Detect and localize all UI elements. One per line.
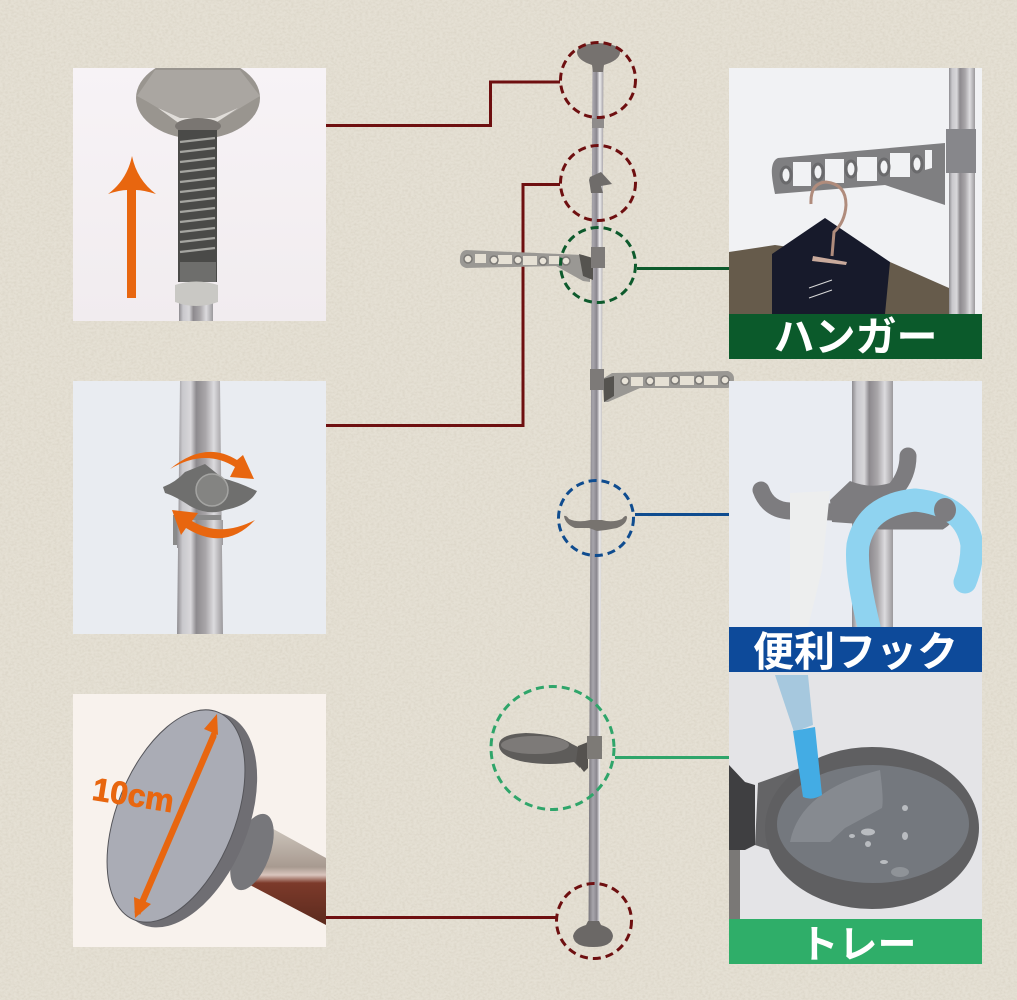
hook arms xyxy=(761,456,946,520)
pole stub xyxy=(729,850,740,919)
water drops xyxy=(849,805,909,877)
hanger arm left xyxy=(460,247,605,282)
dashed callout circles xyxy=(491,42,636,958)
knob xyxy=(163,464,257,512)
banner: hook: 便利フック xyxy=(753,629,958,675)
towel xyxy=(790,502,829,520)
pole xyxy=(177,381,223,634)
rotate arrows xyxy=(170,452,255,538)
small hook xyxy=(564,516,627,531)
tray inner xyxy=(777,765,969,883)
banner: hanger xyxy=(729,314,982,360)
jacket xyxy=(729,245,949,314)
top cap xyxy=(577,43,620,128)
small tray xyxy=(499,733,602,772)
tube xyxy=(250,825,326,925)
panel: base 10cm xyxy=(73,690,326,948)
ceiling disc xyxy=(136,68,260,137)
navy collar xyxy=(772,218,890,314)
10cm label: 10cm xyxy=(90,771,177,819)
wire hook xyxy=(811,182,846,256)
bottom cap xyxy=(573,921,613,947)
twist knob xyxy=(589,172,612,193)
panel: hanger xyxy=(729,68,982,360)
umbrella handle xyxy=(857,500,972,627)
hanger bar xyxy=(812,256,847,265)
bracket xyxy=(729,765,755,850)
collar and tube xyxy=(175,282,218,321)
pole xyxy=(949,68,975,314)
tray bracket wing xyxy=(755,768,799,850)
clear umbrella xyxy=(775,675,813,732)
banner: tray: トレー xyxy=(799,924,917,967)
banner: tray xyxy=(729,919,982,967)
banner: hanger: ハンガー xyxy=(774,314,938,360)
tray photo xyxy=(729,672,982,919)
collar xyxy=(946,129,976,173)
hook tip xyxy=(934,498,956,522)
bracket xyxy=(173,515,221,545)
foot hub xyxy=(230,814,274,890)
water patch xyxy=(790,770,883,842)
connector lines xyxy=(326,82,729,918)
disc face xyxy=(106,709,246,923)
double arrow xyxy=(134,714,218,918)
hanger arm right xyxy=(590,369,734,402)
panel: hook xyxy=(729,381,982,675)
panel: ceiling spring xyxy=(73,57,326,321)
center pole product xyxy=(460,43,734,947)
hanger photo xyxy=(729,68,982,314)
disc rim xyxy=(135,713,258,928)
pole shaft xyxy=(588,60,604,930)
panel: tray xyxy=(729,672,982,967)
blue tube xyxy=(793,727,822,799)
spring xyxy=(178,130,217,282)
panel: twist knob xyxy=(73,381,326,634)
pole xyxy=(852,381,893,627)
orange up arrow xyxy=(108,156,156,298)
arm xyxy=(772,143,945,205)
garment tag xyxy=(809,280,832,298)
hook photo xyxy=(729,381,982,627)
tray outer xyxy=(765,747,979,909)
hook hub xyxy=(830,481,893,524)
